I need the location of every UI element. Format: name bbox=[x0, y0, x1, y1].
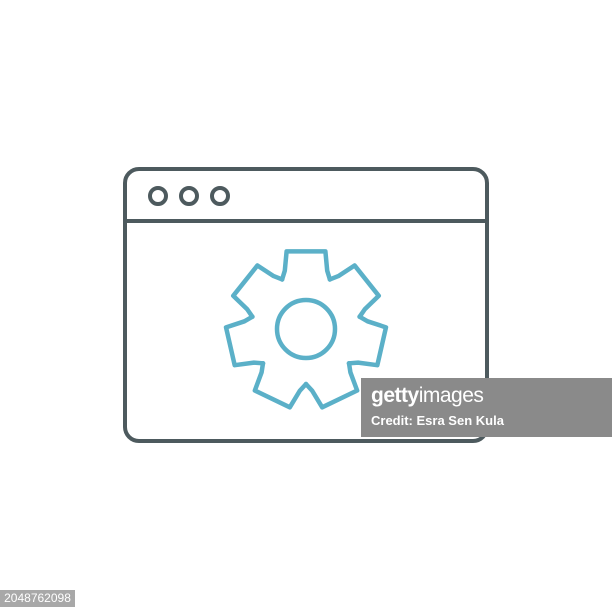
watermark: gettyimages bbox=[371, 384, 483, 407]
watermark bbox=[361, 378, 612, 437]
watermark: Credit: Esra Sen Kula bbox=[371, 413, 504, 428]
gear icon bbox=[225, 251, 387, 409]
image id: 2048762098 bbox=[4, 591, 71, 605]
browser window frame bbox=[125, 169, 487, 441]
